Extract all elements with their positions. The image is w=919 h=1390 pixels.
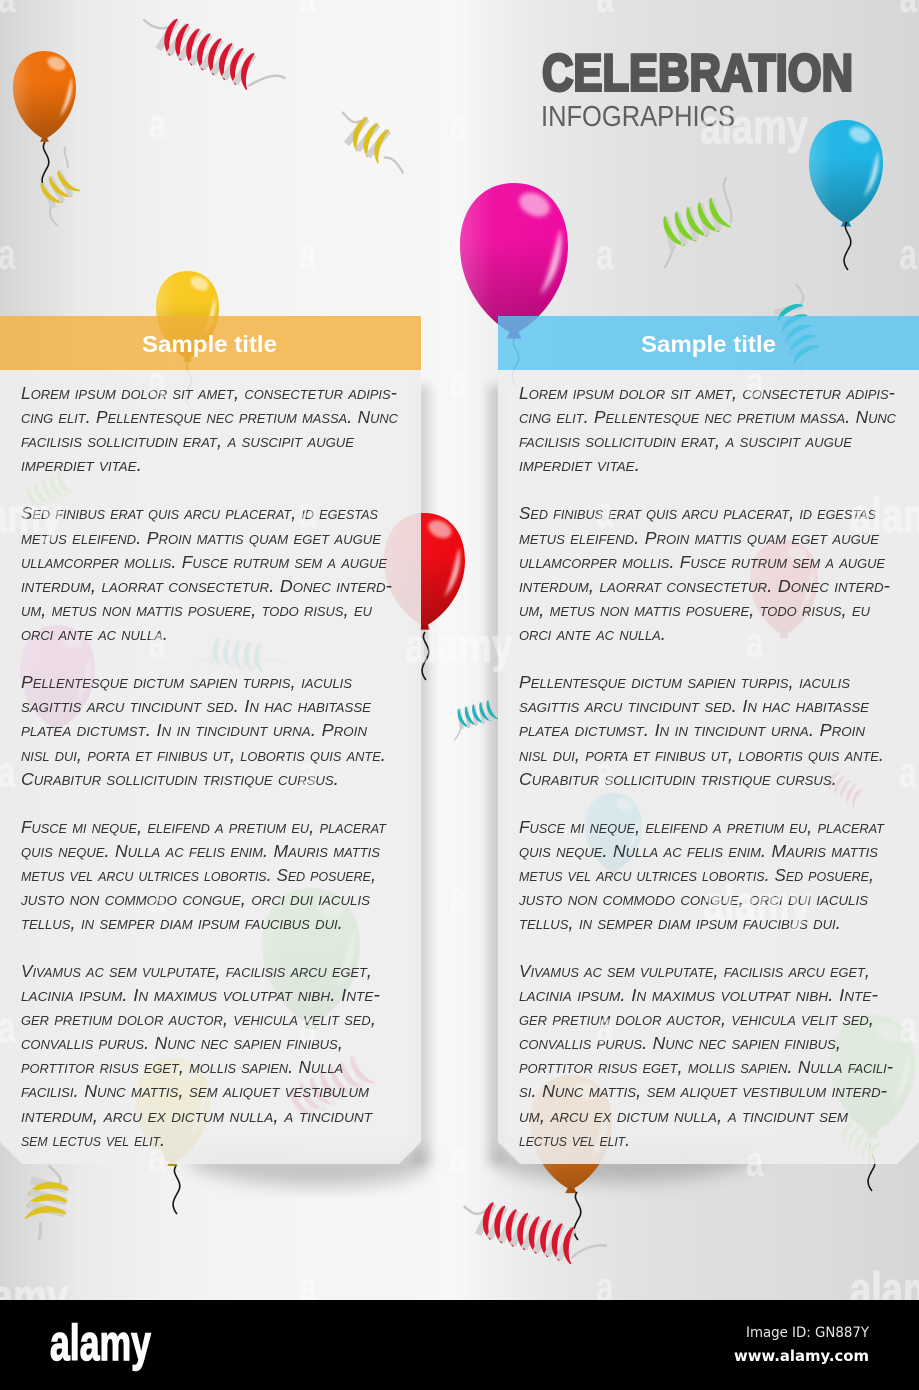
streamer: red bottom [457,1195,609,1272]
streamer: red faded left [287,1053,374,1121]
main title: CELEBRATION [542,44,853,102]
balloon: yellow bottom left [135,1058,210,1214]
left paragraph 5: facilisi. Nunc mattis, sem aliquet vestibulum [21,1081,369,1102]
balloon: red faded right [750,540,818,638]
right paragraph 3 [519,672,884,790]
watermark letters: a [596,230,614,279]
right paragraph 4: justo non commodo congue, orci dui iaculis [518,889,868,910]
streamer: yellow bottom left [23,1164,71,1242]
left paragraph 2: um, metus non mattis posuere, todo risus, eu [21,600,373,621]
watermark letters: a [148,358,166,407]
left paragraph 1: facilisis sollicitudin erat, a suscipit augue [21,431,354,452]
watermark wordmarks: alamy [703,878,811,931]
left paragraph 2: Sed finibus erat quis arcu placerat, id egestas [21,503,378,524]
left paragraph 5: sem lectus vel elit. [21,1130,165,1151]
right paragraph 1: facilisis sollicitudin erat, a suscipit augue [519,431,852,452]
right paragraph 5: lectus vel elit. [519,1130,630,1151]
watermark letters: a [449,100,467,149]
balloon: orange bottom [530,1075,612,1240]
streamer: red faded right [824,770,866,809]
left paragraph 5: porttitor risus eget, mollis sapien. Nulla [21,1057,343,1078]
right paragraph 5: convallis purus. Nunc nec sapien finibus, [519,1033,841,1054]
watermark letters: a [299,488,317,537]
watermark letters: a [596,1003,614,1052]
left paragraph 3: Pellentesque dictum sapien turpis, iaculis [21,672,352,693]
right paragraph 1: Lorem ipsum dolor sit amet, consectetur adipis- [519,383,895,404]
watermark letters: a [596,488,614,537]
subtitle: INFOGRAPHICS [541,101,735,133]
left paragraph 1 [21,383,399,476]
right paragraph 2: interdum, laorrat consectetur. Donec interd- [519,576,890,597]
watermark letters: a [746,618,764,667]
left paragraph 2 [21,503,392,645]
watermark letters: a [899,748,917,797]
balloon: pink faded [20,625,95,733]
watermark letters: a [596,1263,614,1312]
streamer: teal centre [446,699,500,740]
watermark letters: a [148,1133,166,1182]
left title bar [0,316,421,370]
streamer: green faded left [24,470,74,511]
left paragraph 4: tellus, in semper diam ipsum faucibus dui. [21,913,343,934]
right paragraph 3: Pellentesque dictum sapien turpis, iaculis [519,672,850,693]
right paragraph 1: cing elit. Pellentesque nec pretium massa. Nunc [519,407,897,428]
watermark letters: a [746,358,764,407]
right paragraph 1 [519,383,897,476]
right paragraph 5: ger pretium dolor auctor, vehicula velit sed, [519,1009,874,1030]
right paragraph 3: Curabitur sollicitudin tristique cursus. [519,769,837,790]
right paragraph 4 [518,817,885,934]
left paragraph 5 [21,961,380,1151]
left paragraph 1: imperdiet vitae. [21,455,142,476]
left paragraph 3: sagittis arcu tincidunt sed. In hac habitasse [21,696,371,717]
right paragraph 1: imperdiet vitae. [519,455,640,476]
watermark letters: a [299,1003,317,1052]
left paragraph 5: lacinia ipsum. In maximus volutpat nibh. Inte- [21,985,380,1006]
left paragraph 4: Fusce mi neque, eleifend a pretium eu, placerat [21,817,387,838]
left column text [20,383,399,1151]
footer bar [0,1300,919,1390]
right paragraph 4: Fusce mi neque, eleifend a pretium eu, placerat [519,817,885,838]
left paragraph 2: ullamcorper mollis. Fusce rutrum sem a augue [21,552,387,573]
right title bar [498,316,919,370]
streamer: green [642,177,749,268]
panel shadows [190,385,770,1186]
left paragraph 3: platea dictumst. In in tincidunt urna. Proin [21,720,368,741]
balloon: orange top left [13,51,76,190]
balloon: magenta [460,183,568,386]
left paragraph 5: interdum, arcu ex dictum nulla, a tincidunt [21,1106,373,1127]
right paragraph 2: Sed finibus erat quis arcu placerat, id egestas [519,503,876,524]
left paragraph 4: metus vel arcu ultrices lobortis. Sed posuere, [21,865,376,886]
image id: Image ID: GN887Y [746,1325,869,1341]
left paragraph 5: convallis purus. Nunc nec sapien finibus, [21,1033,343,1054]
panel: left body [0,370,421,1164]
watermark letters: a [299,748,317,797]
right paragraph 5: lacinia ipsum. In maximus volutpat nibh. Inte- [519,985,878,1006]
right paragraph 3: platea dictumst. In in tincidunt urna. Proin [519,720,866,741]
watermark letters: a [899,230,917,279]
watermark letters: a [449,873,467,922]
left paragraph 1: Lorem ipsum dolor sit amet, consectetur adipis- [21,383,397,404]
right paragraph 5: um, arcu ex dictum nulla, a tincidunt sem [519,1106,848,1127]
right paragraph 2: um, metus non mattis posuere, todo risus, eu [519,600,871,621]
left sample title: Sample title [142,331,277,357]
left paragraph 4: quis neque. Nulla ac felis enim. Mauris mattis [21,841,380,862]
right paragraph 2: orci ante ac nulla. [519,624,666,645]
footer logo: alamy [50,1315,151,1371]
left paragraph 5: ger pretium dolor auctor, vehicula velit sed, [21,1009,376,1030]
left paragraph 2: orci ante ac nulla. [21,624,168,645]
watermark letters: a [148,873,166,922]
panel: right body [498,370,919,1164]
left paragraph 4 [20,817,387,934]
left paragraph 2: interdum, laorrat consectetur. Donec interd- [21,576,392,597]
streamer: yellow under orange balloon [22,146,100,226]
right paragraph 5 [519,961,893,1151]
right paragraph 5: si. Nunc mattis, sem aliquet vestibulum interd- [519,1081,887,1102]
balloon: green faded [262,888,360,1029]
watermark letters: a [899,1003,917,1052]
left paragraph 1: cing elit. Pellentesque nec pretium massa. Nunc [21,407,399,428]
right paragraph 4: quis neque. Nulla ac felis enim. Mauris mattis [519,841,878,862]
left paragraph 2: metus eleifend. Proin mattis quam eget augue [21,528,381,549]
streamer: red top [134,7,290,102]
right paragraph 4: metus vel arcu ultrices lobortis. Sed posuere, [519,865,874,886]
streamer: green faded right [837,1118,886,1165]
watermark letters: a [746,1137,764,1186]
right paragraph 5: porttitor risus eget, mollis sapien. Nulla facili- [519,1057,893,1078]
right sample title: Sample title [641,331,776,357]
watermark wordmarks: alamy [405,620,513,673]
balloon: red centre [384,513,465,680]
watermark letters: a [449,358,467,407]
balloon: yellow behind left title [156,271,219,405]
watermark letters: a [596,748,614,797]
left paragraph 5: Vivamus ac sem vulputate, facilisis arcu eget, [21,961,372,982]
right column text [518,383,897,1151]
watermark letters: a [148,618,166,667]
left paragraph 3: nisl dui, porta et finibus ut, lobortis quis ante. [21,745,386,766]
right paragraph 3: nisl dui, porta et finibus ut, lobortis quis ante. [519,745,884,766]
watermark letters: a [299,1263,317,1312]
streamer: teal behind right title [766,283,832,379]
streamer: mint faded [197,635,288,676]
watermark letters: a [148,100,166,149]
right paragraph 2: metus eleifend. Proin mattis quam eget augue [519,528,879,549]
right paragraph 4: tellus, in semper diam ipsum faucibus dui. [519,913,841,934]
balloon: green right [830,1015,915,1191]
balloon: blue top right [809,120,883,270]
watermark wordmarks: alamy [700,101,808,154]
balloon: blue faded [585,793,642,875]
website: www.alamy.com [734,1347,869,1365]
left paragraph 3 [21,672,386,790]
left paragraph 3: Curabitur sollicitudin tristique cursus. [21,769,339,790]
watermark letters: a [299,230,317,279]
streamer: yellow top [329,105,418,177]
right paragraph 5: Vivamus ac sem vulputate, facilisis arcu eget, [519,961,870,982]
watermark letters: a [449,1133,467,1182]
left paragraph 4: justo non commodo congue, orci dui iaculis [20,889,370,910]
right paragraph 2 [519,503,890,645]
right paragraph 3: sagittis arcu tincidunt sed. In hac habitasse [519,696,869,717]
right paragraph 2: ullamcorper mollis. Fusce rutrum sem a augue [519,552,885,573]
